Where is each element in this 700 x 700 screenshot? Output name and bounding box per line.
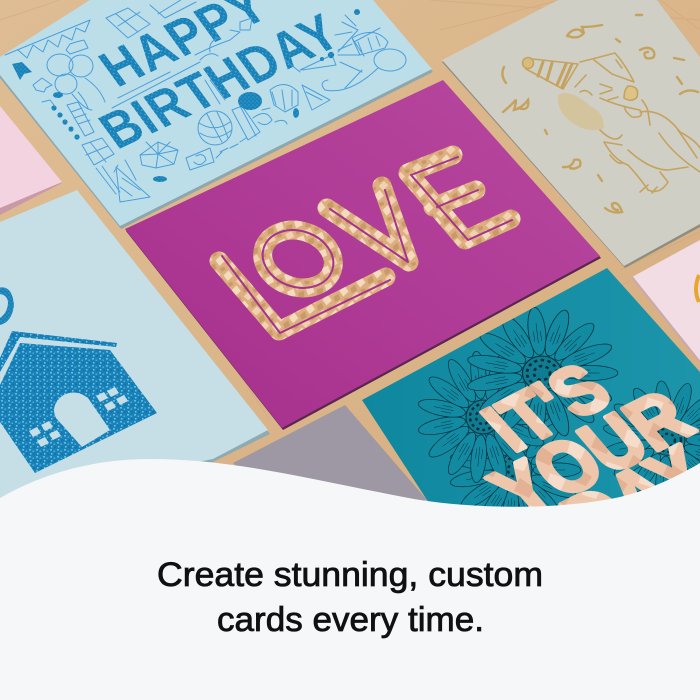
gold foil dog illustration	[522, 53, 700, 193]
caption: Create stunning, custom	[157, 556, 543, 594]
doodles: glitter dots and balloon	[12, 9, 360, 182]
card: Happy Birthday	[0, 0, 433, 229]
LOVE inner cut lines	[222, 157, 512, 333]
card: grey lilac bottom	[233, 405, 427, 530]
headline: It's Your Day: IT'S	[466, 349, 626, 465]
card: pale blue house	[0, 190, 270, 500]
headline: HAPPY BIRTHDAY: BIRTHDAY	[88, 3, 352, 159]
card: teal It's Your Day	[362, 268, 700, 507]
gold foil confetti	[502, 15, 698, 212]
doodles: party illustrations	[5, 0, 406, 202]
gold foil dog ear shading	[558, 93, 604, 130]
caption	[157, 556, 543, 639]
icon: glitter house	[0, 287, 157, 473]
wave panel	[0, 459, 700, 700]
card: pink left	[0, 106, 62, 215]
daisy flowers	[418, 307, 700, 507]
card: purple LOVE	[125, 80, 601, 430]
card: grey with gold foil dog	[442, 0, 700, 268]
card: pink right	[632, 240, 700, 362]
icon: orange circle edge	[696, 275, 699, 302]
wood tabletop background	[0, 0, 700, 520]
headline: LOVE cut-out letters	[219, 155, 511, 331]
caption: cards every time.	[217, 601, 484, 639]
